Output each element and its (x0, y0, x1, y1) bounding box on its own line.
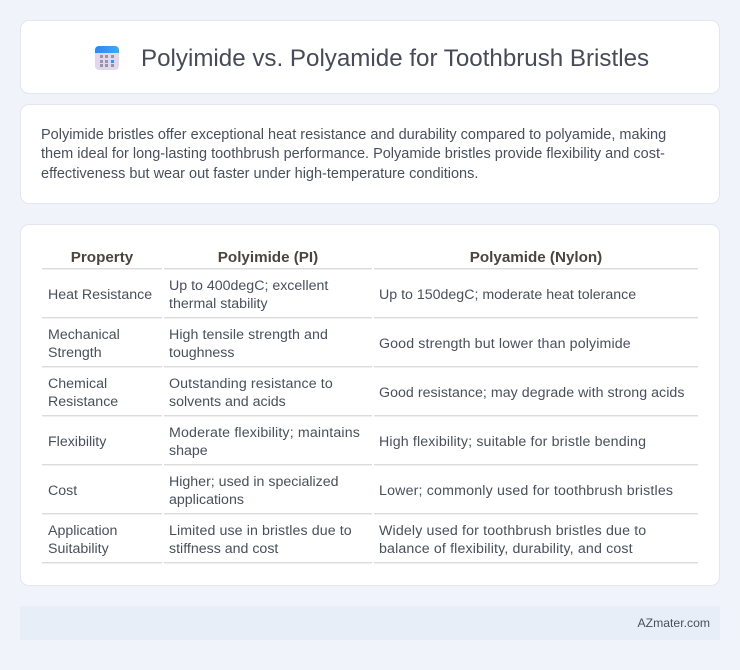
row: heat resistance: Up to 400degC; excellent (169, 278, 328, 294)
row: chemical resistance: Chemical (48, 376, 107, 392)
row: flexibility: Moderate flexibility; maintains (169, 425, 360, 441)
row: heat resistance: Heat Resistance (48, 287, 152, 303)
panel: title card (20, 20, 720, 94)
row: mechanical strength: Strength (48, 345, 102, 361)
row: cost (48, 474, 673, 508)
row: flexibility: Flexibility (48, 434, 106, 450)
row: flexibility (48, 425, 646, 459)
intro text (41, 127, 666, 182)
row: mechanical strength: High tensile strength and (169, 327, 328, 343)
table header: polyimide: Polyimide (PI) (218, 249, 318, 266)
row: chemical resistance: Outstanding resistance to (169, 376, 333, 392)
row: chemical resistance (48, 376, 684, 410)
row: application suitability: Suitability (48, 541, 109, 557)
footer bar (20, 606, 720, 640)
row: mechanical strength: toughness (169, 345, 234, 361)
intro text: effectiveness but wear out faster under high-temperature conditions. (41, 166, 478, 182)
intro text: them ideal for long-lasting toothbrush performance. Polyamide bristles provide flexibility and cost- (41, 146, 665, 162)
panel: introduction (20, 104, 720, 204)
row: mechanical strength (48, 327, 631, 361)
icon: calendar (95, 46, 119, 70)
table header: property: Property (71, 249, 133, 266)
row: chemical resistance: Good resistance; may degrade with strong acids (379, 385, 684, 401)
row: cost: Lower; commonly used for toothbrush bristles (379, 483, 673, 499)
row: heat resistance (48, 278, 636, 312)
row: application suitability: Widely used for toothbrush bristles due to (379, 523, 646, 539)
row: cost: Higher; used in specialized (169, 474, 339, 490)
row: flexibility: High flexibility; suitable for bristle bending (379, 434, 646, 450)
panel: comparison table (20, 224, 720, 586)
row: application suitability: stiffness and cost (169, 541, 278, 557)
row: application suitability (48, 523, 646, 557)
row: chemical resistance: solvents and acids (169, 394, 286, 410)
intro text: Polyimide bristles offer exceptional heat resistance and durability compared to polyamide, making (41, 127, 666, 143)
title: Polyimide vs. Polyamide for Toothbrush Bristles (141, 45, 649, 72)
row: heat resistance: thermal stability (169, 296, 268, 312)
row: application suitability: Limited use in bristles due to (169, 523, 352, 539)
row: cost: Cost (48, 483, 77, 499)
row: flexibility: shape (169, 443, 208, 459)
row: cost: applications (169, 492, 244, 508)
row: heat resistance: Up to 150degC; moderate heat tolerance (379, 287, 636, 303)
row: chemical resistance: Resistance (48, 394, 118, 410)
row: mechanical strength: Mechanical (48, 327, 120, 343)
footer credit: AZmater.com (638, 616, 710, 630)
row: application suitability: Application (48, 523, 117, 539)
row: application suitability: balance of flexibility, durability, and cost (379, 541, 633, 557)
row: mechanical strength: Good strength but lower than polyimide (379, 336, 631, 352)
table header: polyamide: Polyamide (Nylon) (470, 249, 602, 266)
